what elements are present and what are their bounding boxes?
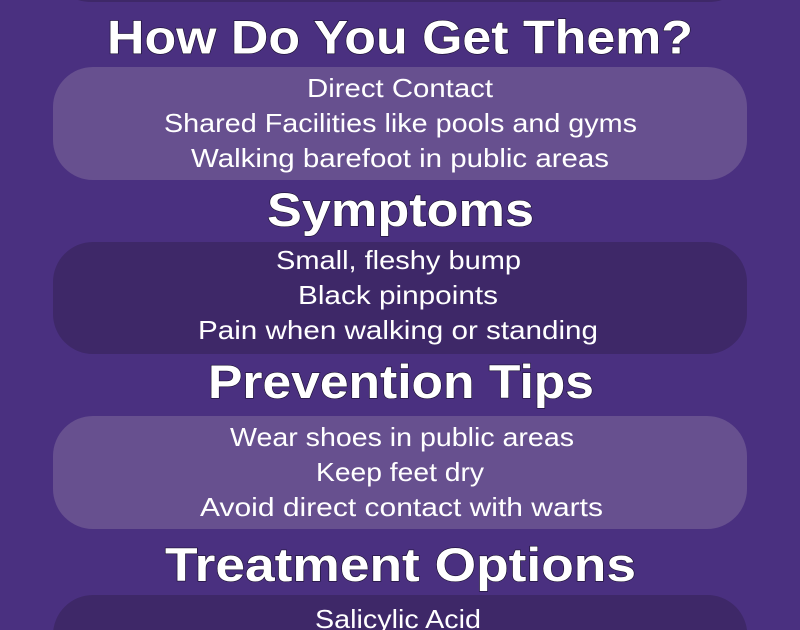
panel: transmission	[53, 67, 747, 180]
top panel remnant	[78, 0, 722, 2]
text: black pinpoints: Black pinpoints	[298, 280, 498, 310]
section: treatment options	[53, 538, 747, 630]
text: avoid direct contact: Avoid direct contact with warts	[200, 492, 603, 522]
panel: treatment	[53, 595, 747, 630]
section: symptoms	[53, 183, 747, 354]
text: keep feet dry: Keep feet dry	[316, 457, 484, 487]
text: direct contact: Direct Contact	[307, 73, 494, 103]
heading: how do you get them: How Do You Get Them?	[107, 10, 693, 64]
section: prevention tips	[53, 355, 747, 529]
heading: symptoms: Symptoms	[267, 183, 534, 236]
section: how do you get them	[53, 10, 747, 180]
text: shared facilities: Shared Facilities like pools and gyms	[164, 108, 637, 138]
heading: treatment options: Treatment Options	[165, 538, 636, 591]
text: walking barefoot: Walking barefoot in public areas	[191, 143, 609, 173]
text: wear shoes: Wear shoes in public areas	[230, 422, 574, 452]
text: pain when walking: Pain when walking or standing	[198, 315, 598, 345]
text: small fleshy bump: Small, fleshy bump	[276, 245, 521, 275]
panel: prevention	[53, 416, 747, 529]
panel: symptoms	[53, 242, 747, 354]
heading: prevention tips: Prevention Tips	[208, 355, 594, 408]
